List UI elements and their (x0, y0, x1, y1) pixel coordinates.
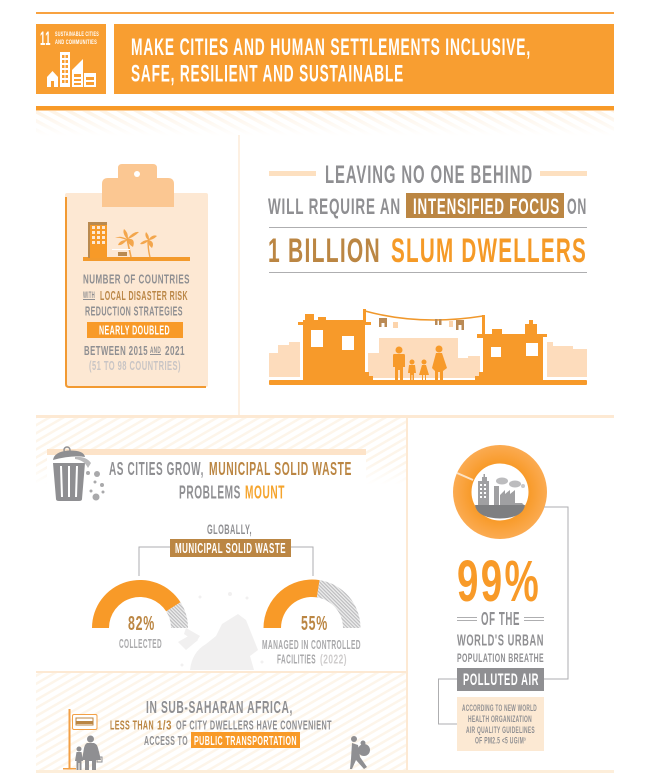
transport text: LESS THAN (110, 718, 154, 732)
horizontal divider (36, 415, 614, 418)
globally label: MUNICIPAL SOLID WASTE (175, 541, 286, 557)
clipboard board (65, 193, 208, 387)
chart: 55% managed: FACILITIES (277, 652, 316, 666)
clipboard text: NEARLY DOUBLED (99, 324, 170, 338)
air text (457, 609, 544, 665)
left house (298, 309, 373, 381)
panel: clipboard disaster risk (65, 164, 208, 387)
air text: OF THE (481, 609, 520, 629)
icon: trash can (53, 447, 104, 501)
connector lines (139, 547, 313, 576)
clipboard text: 2021 (165, 343, 185, 358)
clipboard clip (102, 164, 174, 207)
transport text: ACCESS TO (144, 733, 188, 748)
chart: 55% managed: 55% (301, 612, 328, 635)
transport text (110, 697, 332, 748)
panel: public transportation (36, 671, 406, 770)
chart: 82% collected: COLLECTED (119, 637, 162, 651)
air text: WORLD'S URBAN (457, 632, 544, 650)
polluted air label (457, 668, 544, 691)
clipboard text: WITH (83, 290, 95, 301)
chart: 55% managed: (2022) (320, 652, 347, 666)
transport text: PUBLIC TRANSPORTATION (194, 733, 297, 748)
waste heading: MOUNT (245, 482, 285, 502)
chart: 82% collected (92, 580, 188, 651)
panel: air pollution (438, 445, 568, 751)
title banner: SAFE, RESILIENT AND SUSTAINABLE (131, 60, 404, 88)
WHO guideline note: OF PM2.5 <5 UG/M³ (475, 736, 526, 746)
family figures (393, 346, 447, 381)
thick rule (36, 106, 614, 110)
panel: municipal solid waste (36, 418, 406, 670)
air text: POPULATION BREATHE (457, 653, 544, 665)
polluted air label: POLLUTED AIR (463, 671, 539, 689)
washing line with clothes (365, 311, 483, 320)
panel: leaving no one behind heading: ON (567, 194, 587, 219)
ground (269, 380, 587, 385)
clipboard text: BETWEEN 2015 (84, 343, 148, 358)
pale background buildings (269, 338, 587, 378)
hatched band (36, 111, 614, 136)
icon: ring with city (453, 445, 547, 539)
WHO guideline note (457, 697, 544, 751)
clipboard text: LOCAL DISASTER RISK (100, 288, 188, 303)
icon: walker with backpack (350, 736, 370, 769)
note connector (438, 679, 457, 724)
transport text: IN SUB-SAHARAN AFRICA, (146, 697, 293, 717)
waste heading: MUNICIPAL SOLID WASTE (209, 459, 352, 479)
panel: leaving no one behind heading: INTENSIFIED FOCUS (413, 194, 560, 219)
clipboard text: REDUCTION STRATEGIES (85, 304, 183, 318)
illustration: faded garbage pile (178, 592, 264, 670)
panel: leaving no one behind heading: 1 BILLION (268, 232, 381, 270)
clipboard text: NUMBER OF COUNTRIES (83, 272, 190, 286)
vertical divider (238, 135, 240, 415)
panel divider vertical (406, 418, 408, 770)
panel: leaving no one behind heading (268, 161, 587, 273)
icon: building, palm trees and ground (83, 222, 190, 261)
stat 99%: 99% (457, 549, 541, 614)
transport text: 1/3 (157, 718, 172, 732)
clipboard text: AND (150, 345, 161, 355)
connector line (544, 507, 568, 679)
transport text: OF CITY DWELLERS HAVE CONVENIENT (176, 718, 332, 732)
hatched header background (36, 418, 406, 491)
chart: 82% collected: 82% (128, 612, 155, 635)
WHO guideline note: AIR QUALITY GUIDELINES (466, 725, 535, 735)
waste heading: AS CITIES GROW, (109, 459, 204, 479)
WHO guideline note: HEALTH ORGANIZATION (468, 714, 532, 724)
SDG 11 tile (36, 24, 106, 94)
right house (475, 315, 547, 381)
title banner (114, 24, 614, 94)
WHO guideline note: ACCORDING TO NEW WORLD (462, 703, 537, 713)
chart: 55% managed: MANAGED IN CONTROLLED (262, 638, 361, 652)
icon: city buildings (47, 52, 96, 87)
clipboard text (83, 272, 190, 373)
bottom rule (36, 770, 614, 773)
waste heading: PROBLEMS (179, 482, 241, 502)
SDG 11 tile: SUSTAINABLE CITIES (55, 31, 99, 38)
globally label: GLOBALLY, (207, 521, 252, 537)
SDG 11 tile: AND COMMUNITIES (55, 39, 97, 46)
chart: 55% managed (262, 580, 361, 666)
panel: leaving no one behind heading: WILL REQUIRE AN (268, 194, 401, 219)
clipboard text: (51 TO 98 COUNTRIES) (89, 359, 181, 373)
SDG 11 tile: 11 (40, 29, 51, 50)
icon: bus stop (63, 709, 97, 770)
top rule (36, 12, 614, 14)
icon: woman and child (75, 736, 102, 770)
illustration: slum with family (269, 309, 587, 385)
globally label (170, 521, 291, 557)
waste heading (109, 459, 352, 502)
